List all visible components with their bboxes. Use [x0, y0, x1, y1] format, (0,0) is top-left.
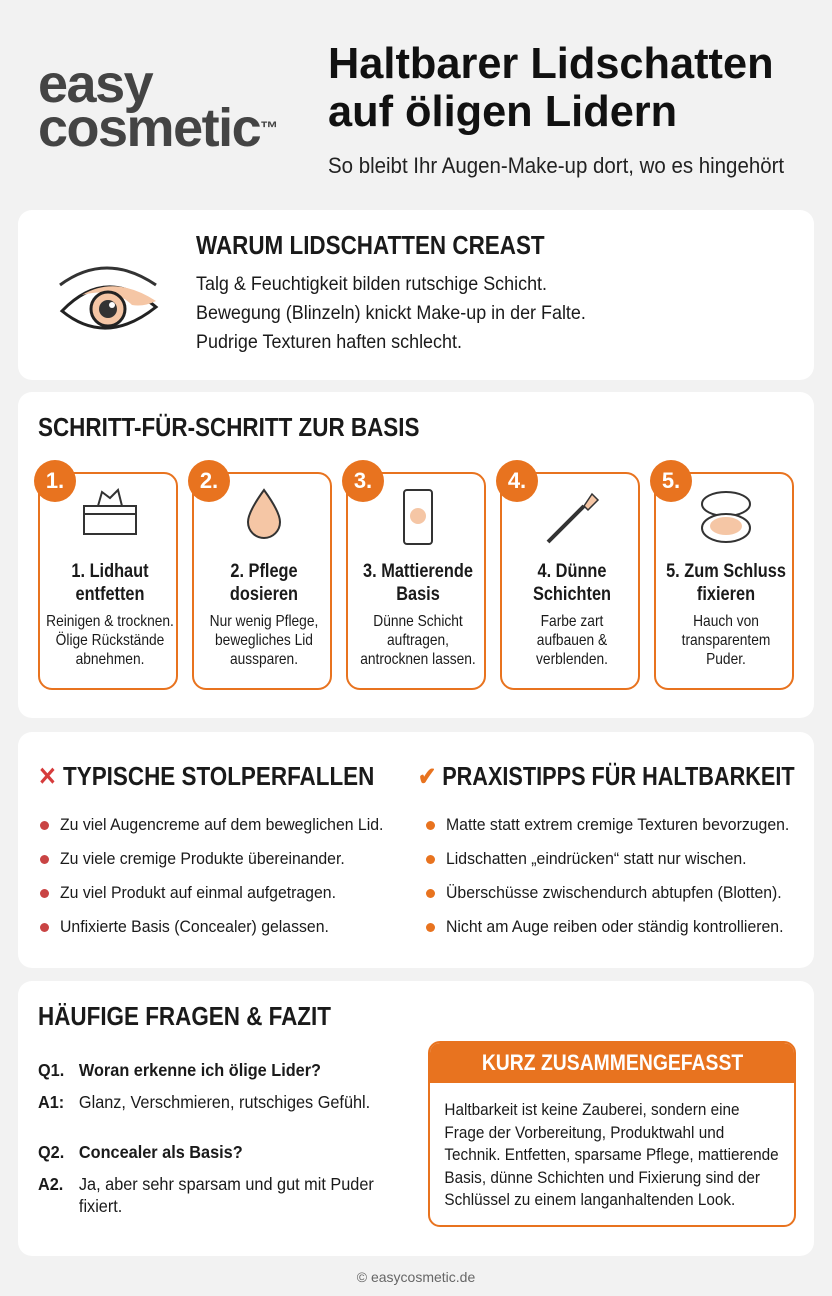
card 5: transparentem [682, 632, 770, 649]
text: Talg & Feuchtigkeit bilden rutschige Schicht. [196, 273, 547, 295]
card 5: 5. [662, 468, 680, 493]
list: tips: Überschüsse zwischendurch abtupfen (Blotten). [446, 883, 782, 902]
FAQ: Glanz, Verschmieren, rutschiges Gefühl. [79, 1092, 370, 1112]
card 1: Ölige Rückstände [56, 632, 164, 649]
list: tips: Matte statt extrem cremige Texturen bevorzugen. [446, 815, 789, 834]
card 4: verblenden. [536, 651, 608, 668]
panel: FAQ [18, 981, 814, 1256]
panel: pitfalls and tips [18, 732, 814, 968]
card 2 [192, 472, 332, 690]
card 3: 3. [354, 468, 372, 493]
heading: tips: ✔ PRAXISTIPPS FÜR HALTBARKEIT [418, 763, 795, 791]
card 2: Nur wenig Pflege, [210, 613, 318, 630]
FAQ: Woran erkenne ich ölige Lider? [79, 1060, 321, 1080]
card 3: 3. Mattierende [363, 561, 473, 582]
card 3: Dünne Schicht [373, 613, 463, 630]
list: tips [426, 815, 789, 936]
callout: summary: Schlüssel zu einem langanhaltenden Look. [444, 1190, 735, 1209]
heading: pitfalls: ✕ TYPISCHE STOLPERFALLEN [38, 763, 374, 791]
card 3: antrocknen lassen. [360, 651, 476, 668]
logo [38, 54, 278, 158]
panel: why creasing [18, 210, 814, 380]
icon: eye [59, 266, 158, 330]
card 5: Hauch von [693, 613, 759, 630]
card 4: 4. Dünne [537, 561, 606, 582]
footer: © easycosmetic.de [357, 1269, 475, 1285]
card 3: auftragen, [387, 632, 449, 649]
card 1: 1. Lidhaut [71, 561, 149, 582]
panel: steps [18, 392, 814, 718]
card 4: Farbe zart [541, 613, 603, 630]
FAQ: A1: [38, 1092, 64, 1112]
list: tips: Lidschatten „eindrücken“ statt nur wischen. [446, 849, 747, 868]
card 2: 2. [200, 468, 218, 493]
card 4: 4. [508, 468, 526, 493]
card 1: 1. [46, 468, 64, 493]
list: tips: Nicht am Auge reiben oder ständig kontrollieren. [446, 917, 783, 936]
list: pitfalls: Unfixierte Basis (Concealer) gelassen. [60, 917, 329, 936]
FAQ: Ja, aber sehr sparsam und gut mit Puder [79, 1174, 374, 1194]
title: auf öligen Lidern [328, 87, 677, 136]
text: Pudrige Texturen haften schlecht. [196, 331, 462, 353]
card 2: dosieren [230, 584, 298, 605]
heading: SCHRITT-FÜR-SCHRITT ZUR BASIS [38, 414, 419, 442]
callout: summary: Basis, dünne Schichten und Fixierung sind der [444, 1168, 760, 1186]
card 2: 2. Pflege [230, 561, 298, 582]
FAQ: A2. [38, 1174, 63, 1194]
heading: HÄUFIGE FRAGEN & FAZIT [38, 1003, 331, 1031]
card 4: Schichten [533, 584, 611, 605]
FAQ [38, 1060, 374, 1216]
callout: summary: Haltbarkeit ist keine Zauberei, sondern eine [444, 1100, 740, 1119]
card 4 [500, 472, 640, 690]
card 1: Reinigen & trocknen. [46, 613, 174, 630]
heading: WARUM LIDSCHATTEN CREAST [196, 232, 545, 260]
callout: summary [428, 1041, 796, 1227]
callout: summary: Frage der Vorbereitung, Produktwahl und [444, 1122, 724, 1142]
card 2: aussparen. [230, 651, 298, 668]
callout: summary: KURZ ZUSAMMENGEFASST [481, 1050, 743, 1075]
FAQ: Q2. [38, 1142, 64, 1162]
text [196, 273, 586, 353]
title [328, 39, 774, 136]
card 1: abnehmen. [76, 651, 144, 668]
logo: easy [38, 54, 152, 114]
card 5 [654, 472, 794, 690]
list: pitfalls [40, 815, 383, 936]
card 2: bewegliches Lid [215, 632, 313, 649]
card 3 [346, 472, 486, 690]
title: Haltbarer Lidschatten [328, 39, 774, 88]
card 1 [38, 472, 178, 690]
logo: cosmetic™ [38, 98, 278, 158]
callout: summary: Technik. Entfetten, sparsame Pflege, mattierende [444, 1145, 779, 1164]
list: pitfalls: Zu viel Augencreme auf dem beweglichen Lid. [60, 815, 383, 834]
list: pitfalls: Zu viele cremige Produkte übereinander. [60, 849, 345, 868]
text: Bewegung (Blinzeln) knickt Make-up in der Falte. [196, 302, 586, 324]
card 4: aufbauen & [537, 632, 607, 649]
list: pitfalls: Zu viel Produkt auf einmal aufgetragen. [60, 883, 336, 902]
FAQ: Concealer als Basis? [79, 1142, 243, 1162]
card 5: fixieren [697, 584, 755, 605]
FAQ: Q1. [38, 1060, 64, 1080]
subtitle: So bleibt Ihr Augen-Make-up dort, wo es hingehört [328, 153, 784, 178]
card 5: 5. Zum Schluss [666, 561, 786, 582]
FAQ: fixiert. [79, 1196, 122, 1216]
card 5: Puder. [706, 651, 746, 668]
card 3: Basis [396, 584, 440, 605]
card 1: entfetten [75, 584, 144, 605]
